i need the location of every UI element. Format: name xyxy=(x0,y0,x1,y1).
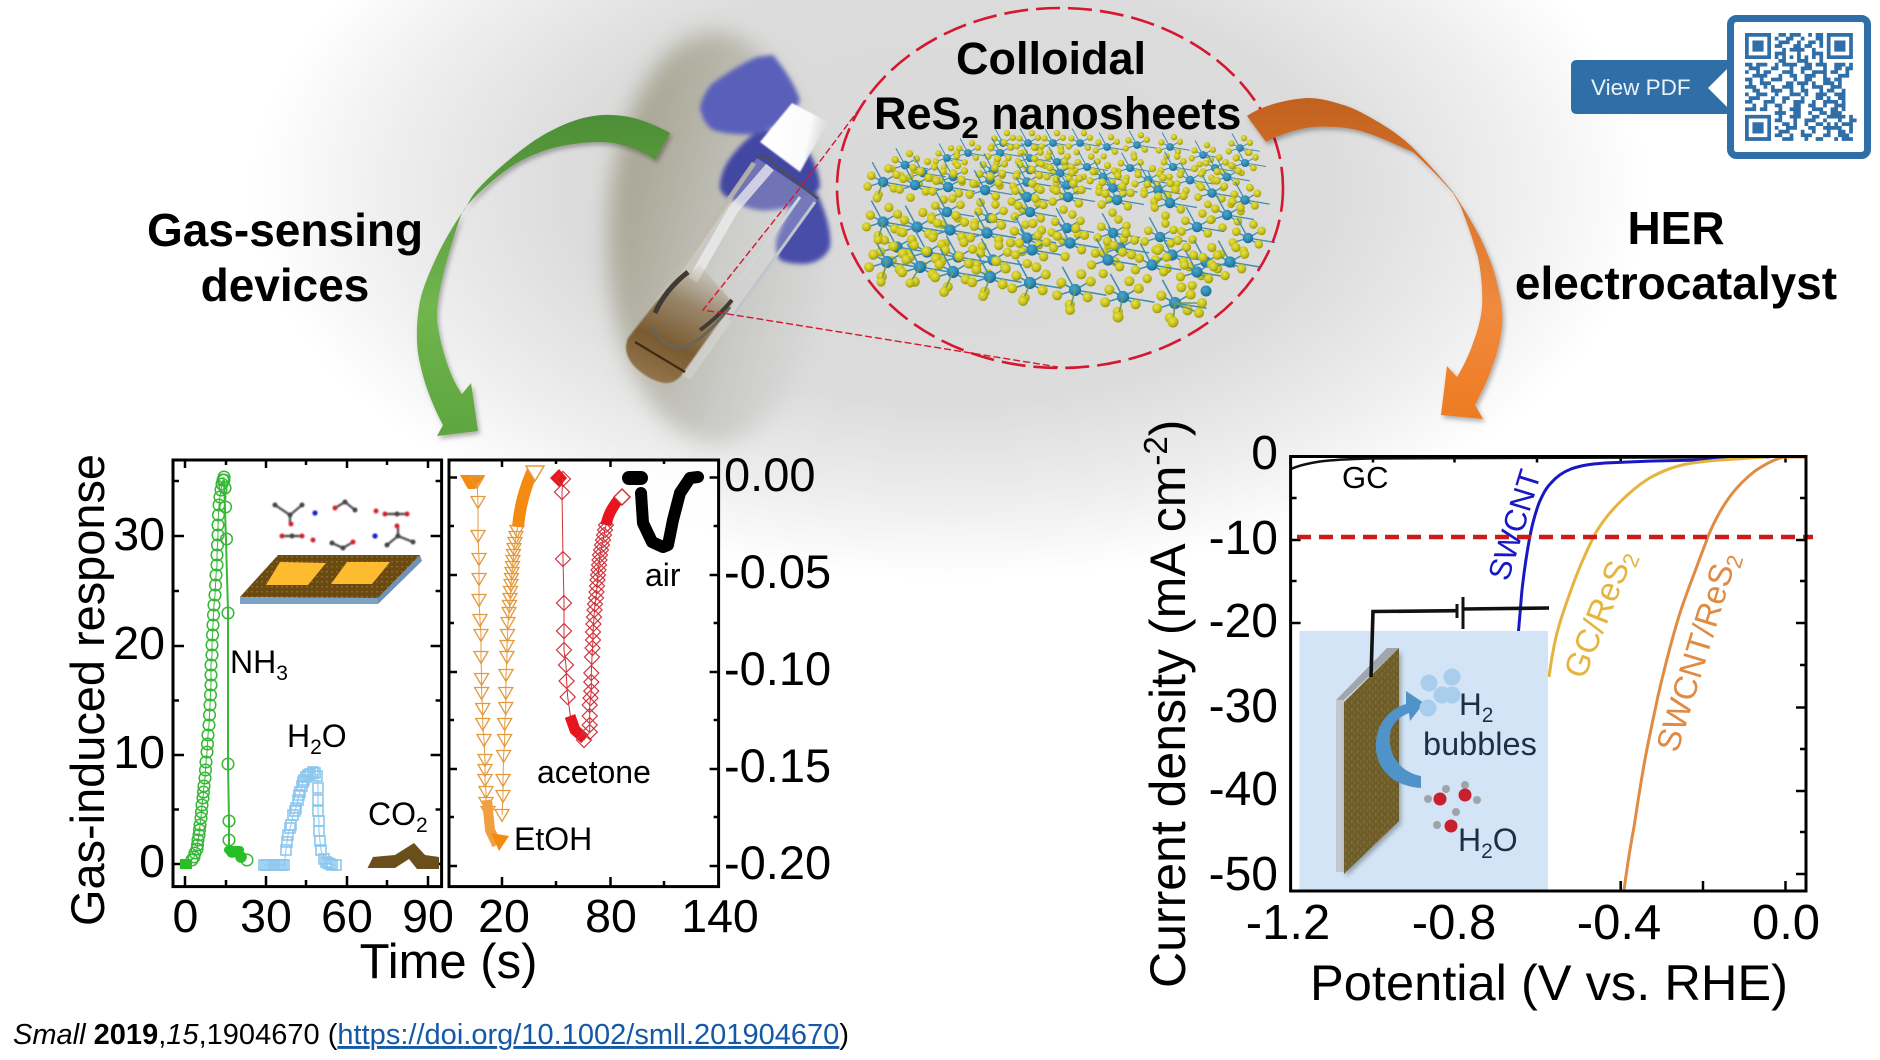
x axis title: Potential (V vs. RHE) xyxy=(1310,955,1788,1011)
right y axis labels: -0.15 xyxy=(724,739,831,792)
QR badge: View PDF xyxy=(1571,18,1868,156)
curve labels: 2 xyxy=(1721,552,1748,571)
gas labels: 3 xyxy=(276,662,288,685)
title: Colloidal ReS2 nanosheets xyxy=(874,33,1241,145)
H2 bubbles label xyxy=(1423,686,1537,762)
QR code xyxy=(1745,35,1857,139)
NH3 series xyxy=(180,477,253,866)
H2O label: O xyxy=(1493,822,1518,858)
gas labels: H xyxy=(287,718,310,754)
left y axis labels: 10 xyxy=(113,726,165,778)
gas labels: 2 xyxy=(310,736,322,759)
View PDF tab: View PDF xyxy=(1591,75,1691,100)
x axis labels: -0.8 xyxy=(1412,896,1496,950)
gas labels right: air xyxy=(645,557,681,593)
heading: HER electrocatalyst: electrocatalyst xyxy=(1515,257,1837,309)
x axis labels: 20 xyxy=(478,890,530,942)
QR card xyxy=(1730,18,1868,156)
GC/ReS2 curve xyxy=(1549,457,1765,677)
right y axis labels: -0.20 xyxy=(724,836,831,889)
x axis labels: 90 xyxy=(402,890,454,942)
left y axis labels xyxy=(113,508,165,887)
right y axis labels xyxy=(724,448,831,889)
citation: Small 2019,15,1904670 (https://doi.org/10.1002/smll.201904670) xyxy=(13,1019,849,1051)
x axis labels: 140 xyxy=(681,890,759,942)
left panel: response vs time xyxy=(173,460,442,887)
blurred oval backdrop xyxy=(608,33,824,443)
curve labels: 2 xyxy=(1617,550,1645,571)
y axis labels xyxy=(1209,427,1278,901)
x axis labels xyxy=(172,890,759,942)
x axis labels: -0.4 xyxy=(1577,896,1661,950)
GC curve xyxy=(1291,457,1770,469)
blue glove fingers xyxy=(700,55,830,264)
x axis labels: -1.2 xyxy=(1246,896,1330,950)
right y axis labels: -0.05 xyxy=(724,545,831,598)
x axis labels: 0.0 xyxy=(1752,896,1820,950)
blue curved arrow xyxy=(1376,691,1424,788)
H2 bubbles label: bubbles xyxy=(1423,726,1537,762)
heading: HER electrocatalyst: HER xyxy=(1627,202,1725,254)
y axis labels: 0 xyxy=(1251,427,1278,480)
curve labels xyxy=(1342,460,1748,757)
glass tube xyxy=(627,156,818,380)
x axis labels: 60 xyxy=(321,890,373,942)
air series xyxy=(629,477,698,547)
gas labels xyxy=(230,644,428,837)
H2O label: H xyxy=(1458,822,1481,858)
gas labels right xyxy=(514,557,681,857)
y axis labels: -50 xyxy=(1209,848,1278,901)
View PDF tab xyxy=(1571,60,1730,114)
y axis labels: -30 xyxy=(1209,680,1278,733)
curve labels: GC/ReS xyxy=(1556,555,1636,683)
right panel: response vs time xyxy=(449,460,719,887)
y axis title: Current density (mA cm xyxy=(1140,466,1196,988)
SWCNT curve xyxy=(1518,456,1765,631)
gas labels: 2 xyxy=(416,814,428,837)
gas labels right: acetone xyxy=(537,754,651,790)
hydrogen bubbles xyxy=(1420,668,1460,716)
electrochemical cell inset xyxy=(1299,597,1549,890)
left y axis labels: 0 xyxy=(139,835,165,887)
right y axis labels: -0.10 xyxy=(724,642,831,695)
title: Colloidal ReS2 nanosheets: Colloidal xyxy=(956,33,1146,84)
gas labels: O xyxy=(322,718,347,754)
heading: gas-sensing devices: Gas-sensing xyxy=(147,204,423,256)
gas response chart xyxy=(61,448,831,989)
curve labels: SWCNT xyxy=(1481,465,1548,584)
white vial cap xyxy=(760,103,828,172)
gas labels right: EtOH xyxy=(514,821,592,857)
x axis labels: 0 xyxy=(172,890,198,942)
water molecules xyxy=(1424,781,1481,832)
vial photograph xyxy=(608,33,830,443)
H2O series xyxy=(264,772,336,865)
lattice of ReS2 xyxy=(862,128,1275,328)
dashed zoom guide lines xyxy=(703,100,1058,367)
curve labels: SWCNT/ReS xyxy=(1649,559,1741,756)
x axis labels: 80 xyxy=(585,890,637,942)
y axis labels: -20 xyxy=(1209,595,1278,648)
title: Colloidal ReS2 nanosheets: 2 xyxy=(962,110,979,145)
H2 bubbles label: 2 xyxy=(1482,704,1493,727)
heading: gas-sensing devices: devices xyxy=(201,259,369,311)
EtOH series xyxy=(460,466,544,851)
y axis title: ) xyxy=(1140,420,1196,436)
left y axis labels: 30 xyxy=(113,508,165,560)
CO2 series xyxy=(368,843,439,869)
H2O label: 2 xyxy=(1481,840,1493,863)
gas labels: CO xyxy=(368,796,416,832)
gas labels: NH xyxy=(230,644,276,680)
electrode xyxy=(1336,648,1399,874)
dashed zoom circle xyxy=(837,8,1283,368)
magnified circle xyxy=(703,8,1283,368)
curve labels: GC xyxy=(1342,460,1388,495)
title: Colloidal ReS2 nanosheets: nanosheets xyxy=(979,88,1241,139)
reference line at -10 xyxy=(1297,535,1813,539)
SWCNT/ReS2 curve xyxy=(1624,457,1806,890)
brown colloid xyxy=(626,265,733,383)
y axis labels: -40 xyxy=(1209,763,1278,816)
HER polarization chart xyxy=(1137,420,1820,1011)
H2 bubbles label: H xyxy=(1459,686,1482,722)
heading: HER electrocatalyst xyxy=(1515,202,1837,309)
title: Colloidal ReS2 nanosheets: ReS xyxy=(874,88,962,139)
chemiresistor inset with molecules xyxy=(240,500,422,604)
acetone series xyxy=(550,469,630,740)
y axis labels: -10 xyxy=(1209,512,1278,565)
right y axis labels: 0.00 xyxy=(724,448,815,501)
y axis title: Gas-induced response xyxy=(61,454,114,926)
left y axis labels: 20 xyxy=(113,617,165,669)
wire and battery xyxy=(1371,608,1549,677)
x axis labels xyxy=(1246,896,1820,950)
orange arrow to HER xyxy=(1247,98,1502,419)
x axis title: Time (s) xyxy=(360,935,537,989)
heading: gas-sensing devices xyxy=(147,204,423,311)
y axis title: -2 xyxy=(1137,436,1174,466)
green arrow to gas sensing xyxy=(417,115,670,436)
x axis labels: 30 xyxy=(240,890,292,942)
